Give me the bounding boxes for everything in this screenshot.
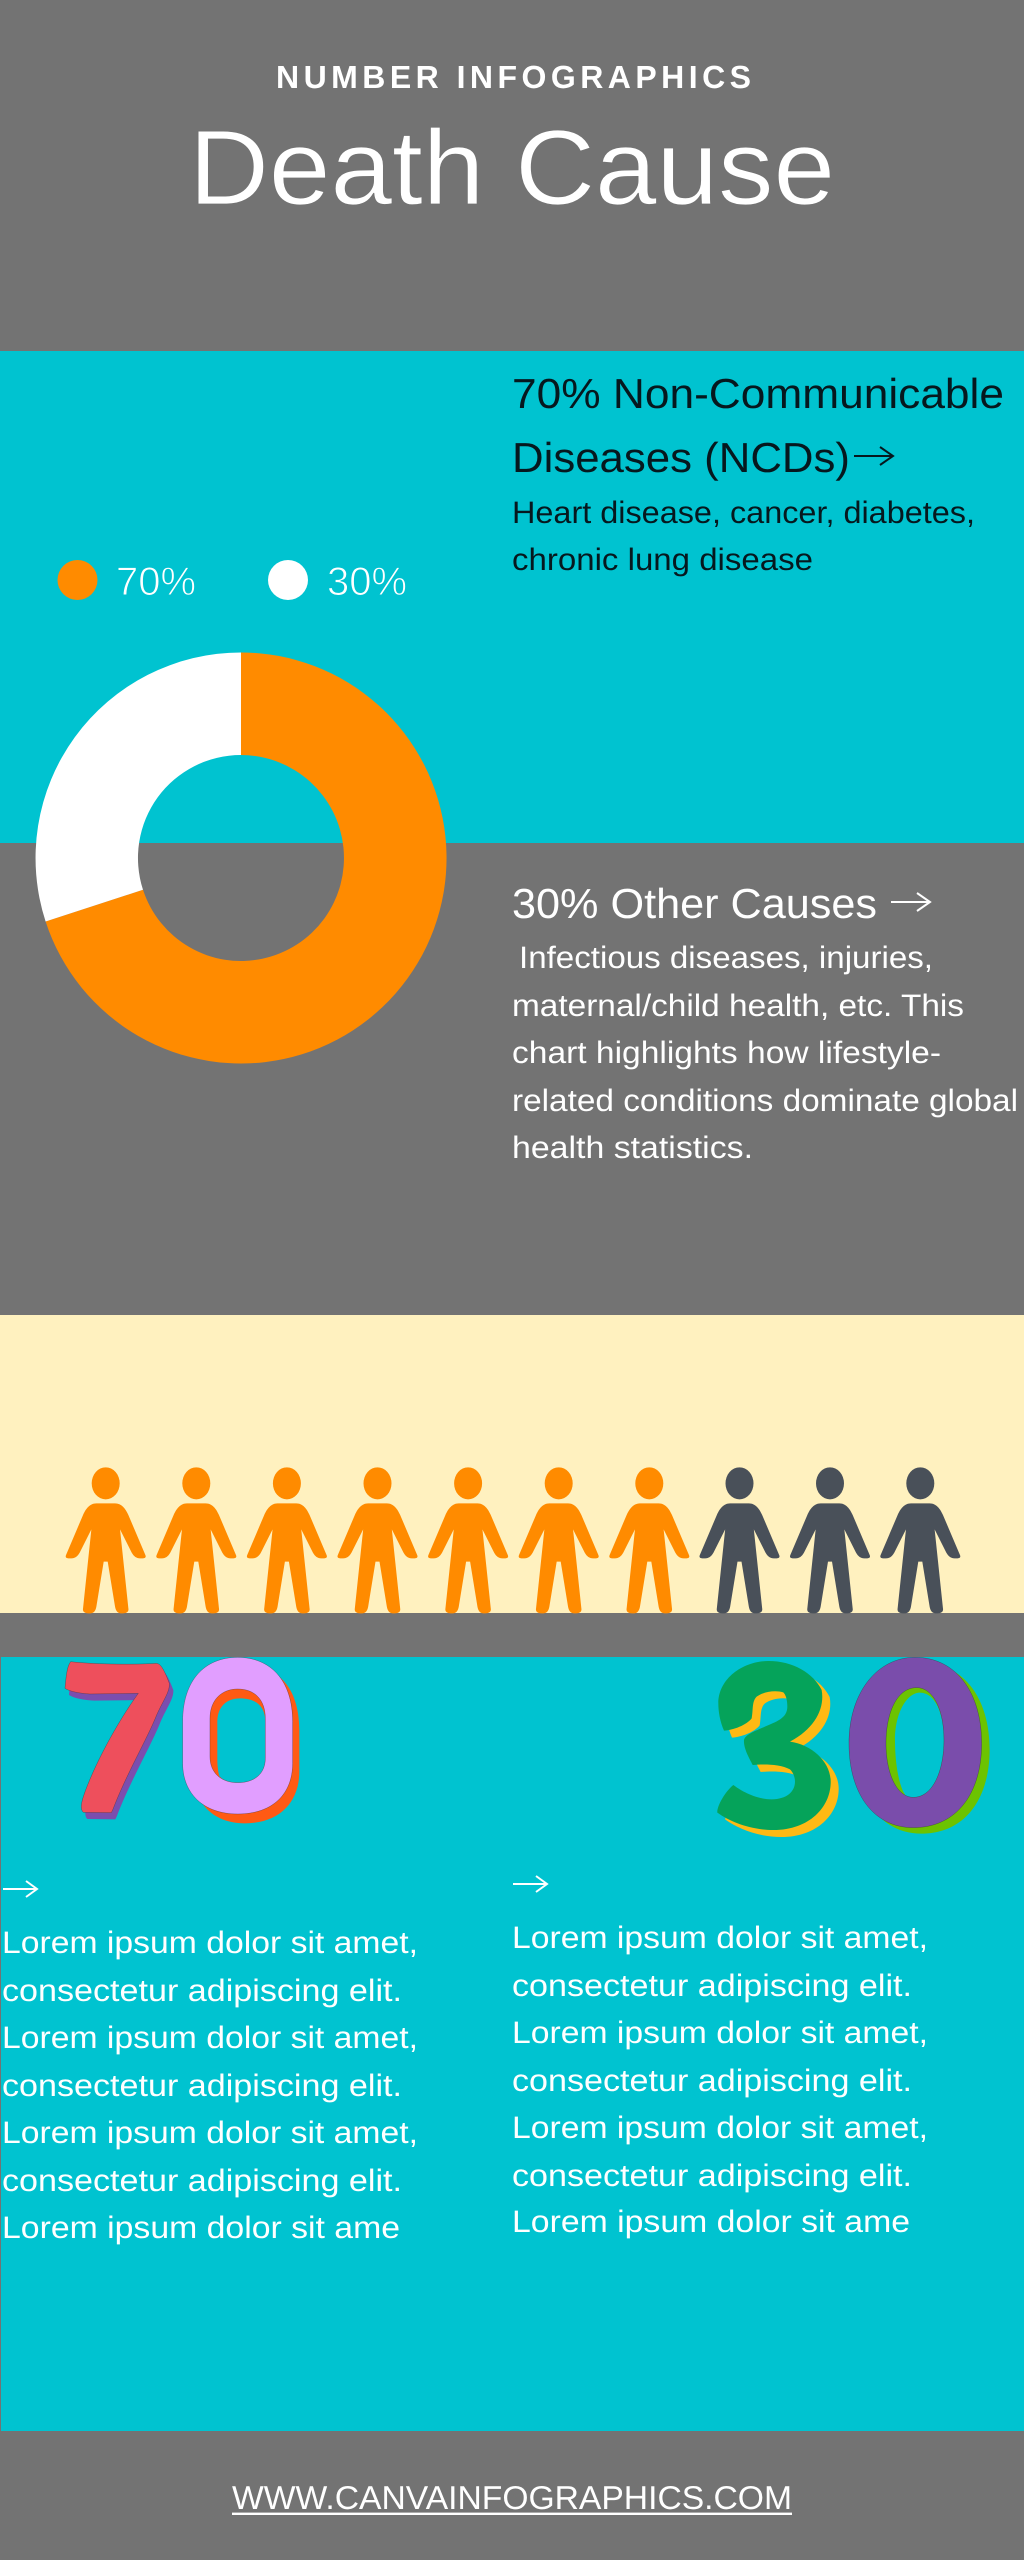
digit 3 face [717,1661,831,1830]
text block: left column lorem ipsum: Lorem ipsum dolor sit ame [2,2210,400,2245]
big number: 30 [717,1657,990,1837]
big number: 70 [65,1657,299,1823]
text block: 70% non-communicable diseases: 70% Non-Communicable [512,370,1004,417]
text block: left column lorem ipsum: Lorem ipsum dolor sit amet, [2,2020,418,2055]
text block: right column lorem ipsum: Lorem ipsum dolor sit amet, [512,2110,928,2145]
donut chart [36,652,447,1064]
legend item: 30%: 30% [327,560,407,604]
panel: teal NCD section [0,351,1024,843]
text block: left column lorem ipsum: Lorem ipsum dolor sit amet, [2,2115,418,2150]
legend item: 30% [268,560,407,604]
text block: 30% other causes: maternal/child health, etc. This [512,988,964,1023]
text block: right column lorem ipsum: consectetur adipiscing elit. [512,2158,912,2193]
arrow [854,447,893,465]
digit 3 shadow [725,1668,839,1837]
digit 0 shadow [200,1665,299,1823]
legend [58,560,407,604]
person 2 [156,1467,236,1613]
person 9 [790,1467,870,1613]
digit 0 shadow [857,1663,990,1834]
person 8 [699,1467,780,1613]
panel: teal numbers section [1,1657,1024,2431]
text block: right column lorem ipsum: Lorem ipsum dolor sit amet, [512,1920,928,1955]
text block: right column lorem ipsum: Lorem ipsum dolor sit amet, [512,2015,928,2050]
panel: grey other causes section [0,843,1024,1315]
donut segment: 70% [46,652,447,1064]
person 1 [66,1467,146,1613]
text block: 30% other causes: chart highlights how lifestyle- [512,1035,941,1070]
title: Death Cause [189,109,835,227]
arrow [3,1881,37,1897]
text block: 70% non-communicable diseases: Diseases (NCDs) [512,434,850,481]
text block: right column lorem ipsum: Lorem ipsum dolor sit ame [512,2204,910,2239]
text block: 30% other causes [512,880,1018,1165]
person 5 [428,1467,508,1613]
arrow [891,893,930,911]
kicker: number infographics: NUMBER INFOGRAPHICS [276,59,751,95]
text block: right column lorem ipsum: consectetur adipiscing elit. [512,1968,912,2003]
donut segment: 30% [36,652,241,922]
arrow [513,1876,547,1892]
panel: header [0,0,1024,351]
text block: 30% other causes: 30% Other Causes [512,880,877,927]
text block: 70% non-communicable diseases: chronic lung disease [512,542,813,577]
people pictogram: 7 of 10 orange [66,1467,960,1613]
footer link: WWW.CANVAINFOGRAPHICS.COM [232,2479,792,2516]
text block: 70% non-communicable diseases: Heart disease, cancer, diabetes, [512,495,975,530]
text block: 70% non-communicable diseases [512,370,1004,577]
digit 7 shadow [69,1668,173,1819]
digit 0 face [183,1657,293,1814]
text block: right column lorem ipsum: consectetur adipiscing elit. [512,2063,912,2098]
digit 0 face [849,1657,982,1828]
text block: left column lorem ipsum: consectetur adipiscing elit. [2,2068,402,2103]
person 3 [247,1467,327,1613]
legend item: 70%: 70% [116,560,196,604]
text block: left column lorem ipsum: Lorem ipsum dolor sit amet, [2,1925,418,1960]
text block: 30% other causes: health statistics. [512,1130,753,1165]
panel: grey footer [0,2431,1024,2560]
text block: left column lorem ipsum [2,1881,418,2245]
text block: 30% other causes: related conditions dominate global [512,1083,1018,1118]
text block: 30% other causes: Infectious diseases, injuries, [519,940,933,975]
person 6 [519,1467,599,1613]
person 10 [880,1467,960,1613]
panel: grey divider band [0,1613,1024,1657]
legend item: 70% [58,560,196,604]
panel: cream people section [0,1315,1024,1613]
person 4 [337,1467,418,1613]
person 7 [609,1467,689,1613]
digit 7 face [65,1662,169,1813]
text block: left column lorem ipsum: consectetur adipiscing elit. [2,1973,402,2008]
text block: left column lorem ipsum: consectetur adipiscing elit. [2,2163,402,2198]
text block: right column lorem ipsum [512,1876,928,2239]
